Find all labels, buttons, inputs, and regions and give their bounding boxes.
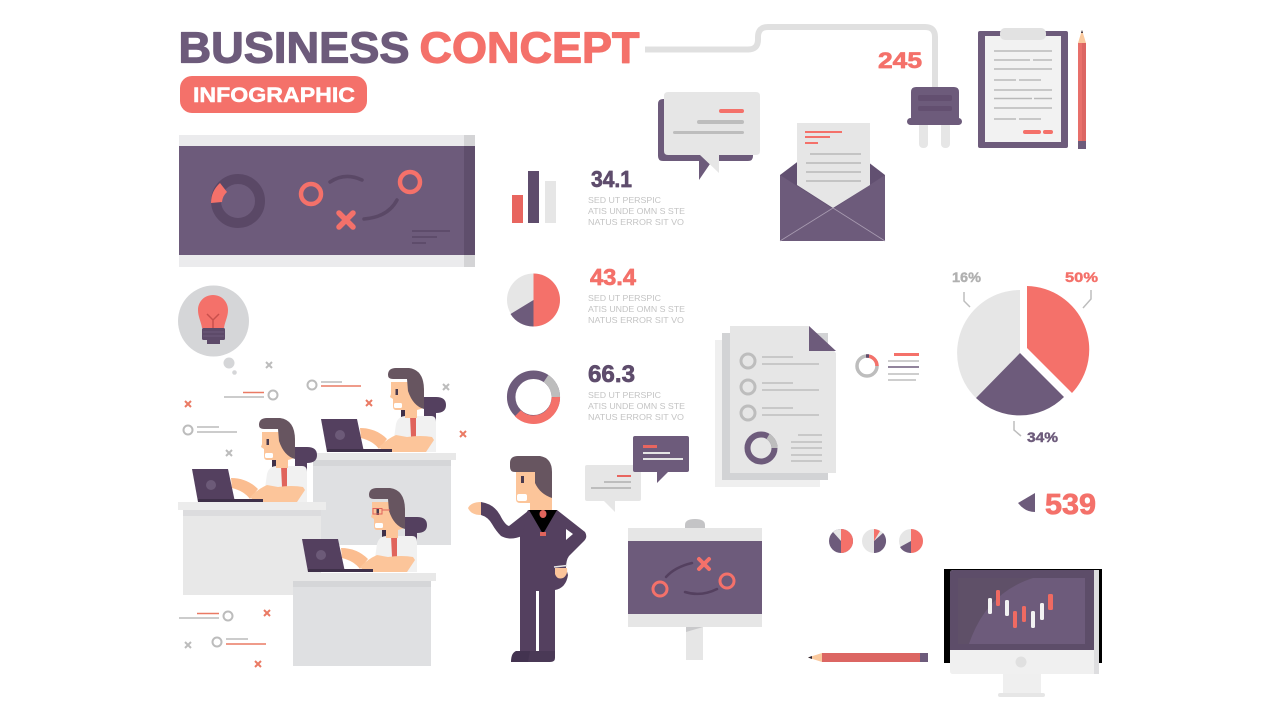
stat: bar chart 34.1: ATIS UNDE OMN S STE (588, 206, 685, 216)
icon: chat bubble (658, 92, 760, 180)
icon: horizontal pencil (808, 653, 928, 662)
businessman (468, 456, 586, 662)
number 245: 245 (878, 48, 922, 73)
title: CONCEPT (420, 24, 640, 72)
pie label 50%: 50% (1065, 269, 1099, 285)
mini pie charts (829, 529, 923, 553)
board play diagram (301, 172, 420, 227)
document stack (715, 326, 836, 487)
number 539 with wedge: 539 (1045, 489, 1096, 521)
plug cable (645, 27, 935, 88)
speech bubble: grey (585, 465, 641, 512)
stat: pie chart 43.4: ATIS UNDE OMN S STE (588, 304, 685, 314)
large pie chart (952, 269, 1099, 445)
subtitle badge (180, 76, 367, 113)
stat: donut chart 66.3: NATUS ERROR SIT VO (588, 412, 684, 422)
icon: vertical pencil (1078, 30, 1086, 149)
pie label 16%: 16% (952, 269, 982, 285)
stat: pie chart 43.4: NATUS ERROR SIT VO (588, 315, 684, 325)
worker at upper desk (313, 368, 456, 545)
stat: bar chart 34.1 (512, 166, 685, 227)
decorative marks left (179, 362, 466, 667)
icon: envelope (780, 123, 885, 241)
title: BUSINESS (178, 24, 410, 72)
small donut legend (857, 353, 919, 380)
stat: donut chart 66.3 (511, 361, 685, 422)
icon: clipboard (978, 28, 1068, 148)
stat: pie chart 43.4 (507, 264, 685, 327)
stat: donut chart 66.3: 66.3 (588, 361, 635, 388)
stat: donut chart 66.3: SED UT PERSPIC (588, 390, 661, 400)
icon: lightbulb thought (178, 286, 249, 375)
document donut (748, 434, 774, 462)
pie label 34% (1014, 421, 1059, 445)
stat: pie chart 43.4: SED UT PERSPIC (588, 293, 661, 303)
pie label 16% (952, 269, 982, 307)
candlesticks (988, 590, 1053, 628)
pie label 50% (1065, 269, 1099, 308)
board donut chart (211, 179, 260, 223)
subtitle badge: INFOGRAPHIC (193, 84, 355, 107)
stat: bar chart 34.1: 34.1 (591, 166, 632, 192)
title (178, 24, 640, 72)
stat: donut chart 66.3: ATIS UNDE OMN S STE (588, 401, 685, 411)
icon: plug (907, 87, 962, 148)
pie label 34%: 34% (1027, 429, 1059, 445)
number 539 with wedge (1018, 489, 1096, 521)
stat: bar chart 34.1: NATUS ERROR SIT VO (588, 217, 684, 227)
monitor with candlestick chart (944, 569, 1102, 697)
speech bubble: purple (633, 436, 689, 483)
panel: strategy board (179, 135, 475, 267)
worker at front desk (293, 488, 436, 666)
worker at left desk (178, 418, 326, 595)
stat: pie chart 43.4: 43.4 (590, 264, 636, 290)
panel: presentation stand (628, 519, 762, 660)
stat: bar chart 34.1: SED UT PERSPIC (588, 195, 661, 205)
